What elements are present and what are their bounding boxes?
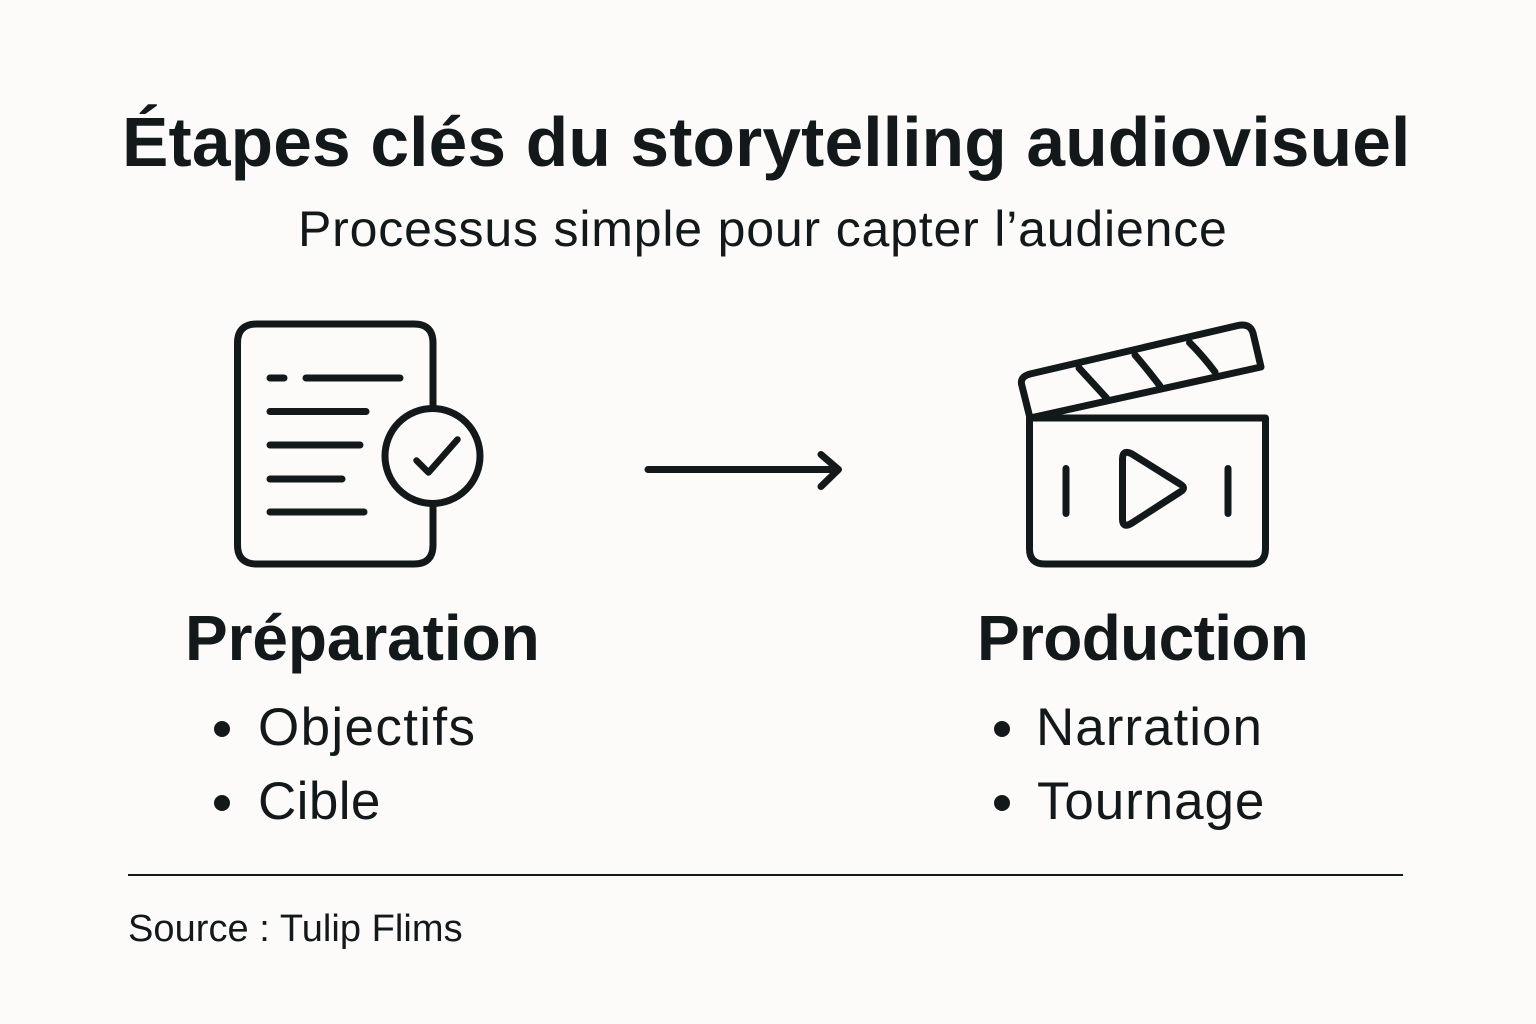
- icon: clapperboard: [1018, 322, 1269, 568]
- title: Étapes clés du storytelling audiovisuel: [122, 103, 1410, 181]
- list: preparation items: [214, 698, 476, 831]
- heading: Préparation: Préparation: [185, 602, 540, 674]
- subtitle: Processus simple pour capter l’audience: [298, 201, 1228, 257]
- list: production items: [994, 698, 1265, 831]
- source note: Source : Tulip Flims: [128, 908, 463, 950]
- icon: document with check: [234, 320, 484, 568]
- list item: Objectifs: Objectifs: [258, 698, 476, 757]
- list item: Tournage: Tournage: [1037, 772, 1265, 831]
- arrow: [644, 451, 842, 490]
- list item: Narration: Narration: [1036, 698, 1263, 757]
- list item: Cible: Cible: [258, 772, 381, 831]
- heading: Production: Production: [977, 602, 1308, 674]
